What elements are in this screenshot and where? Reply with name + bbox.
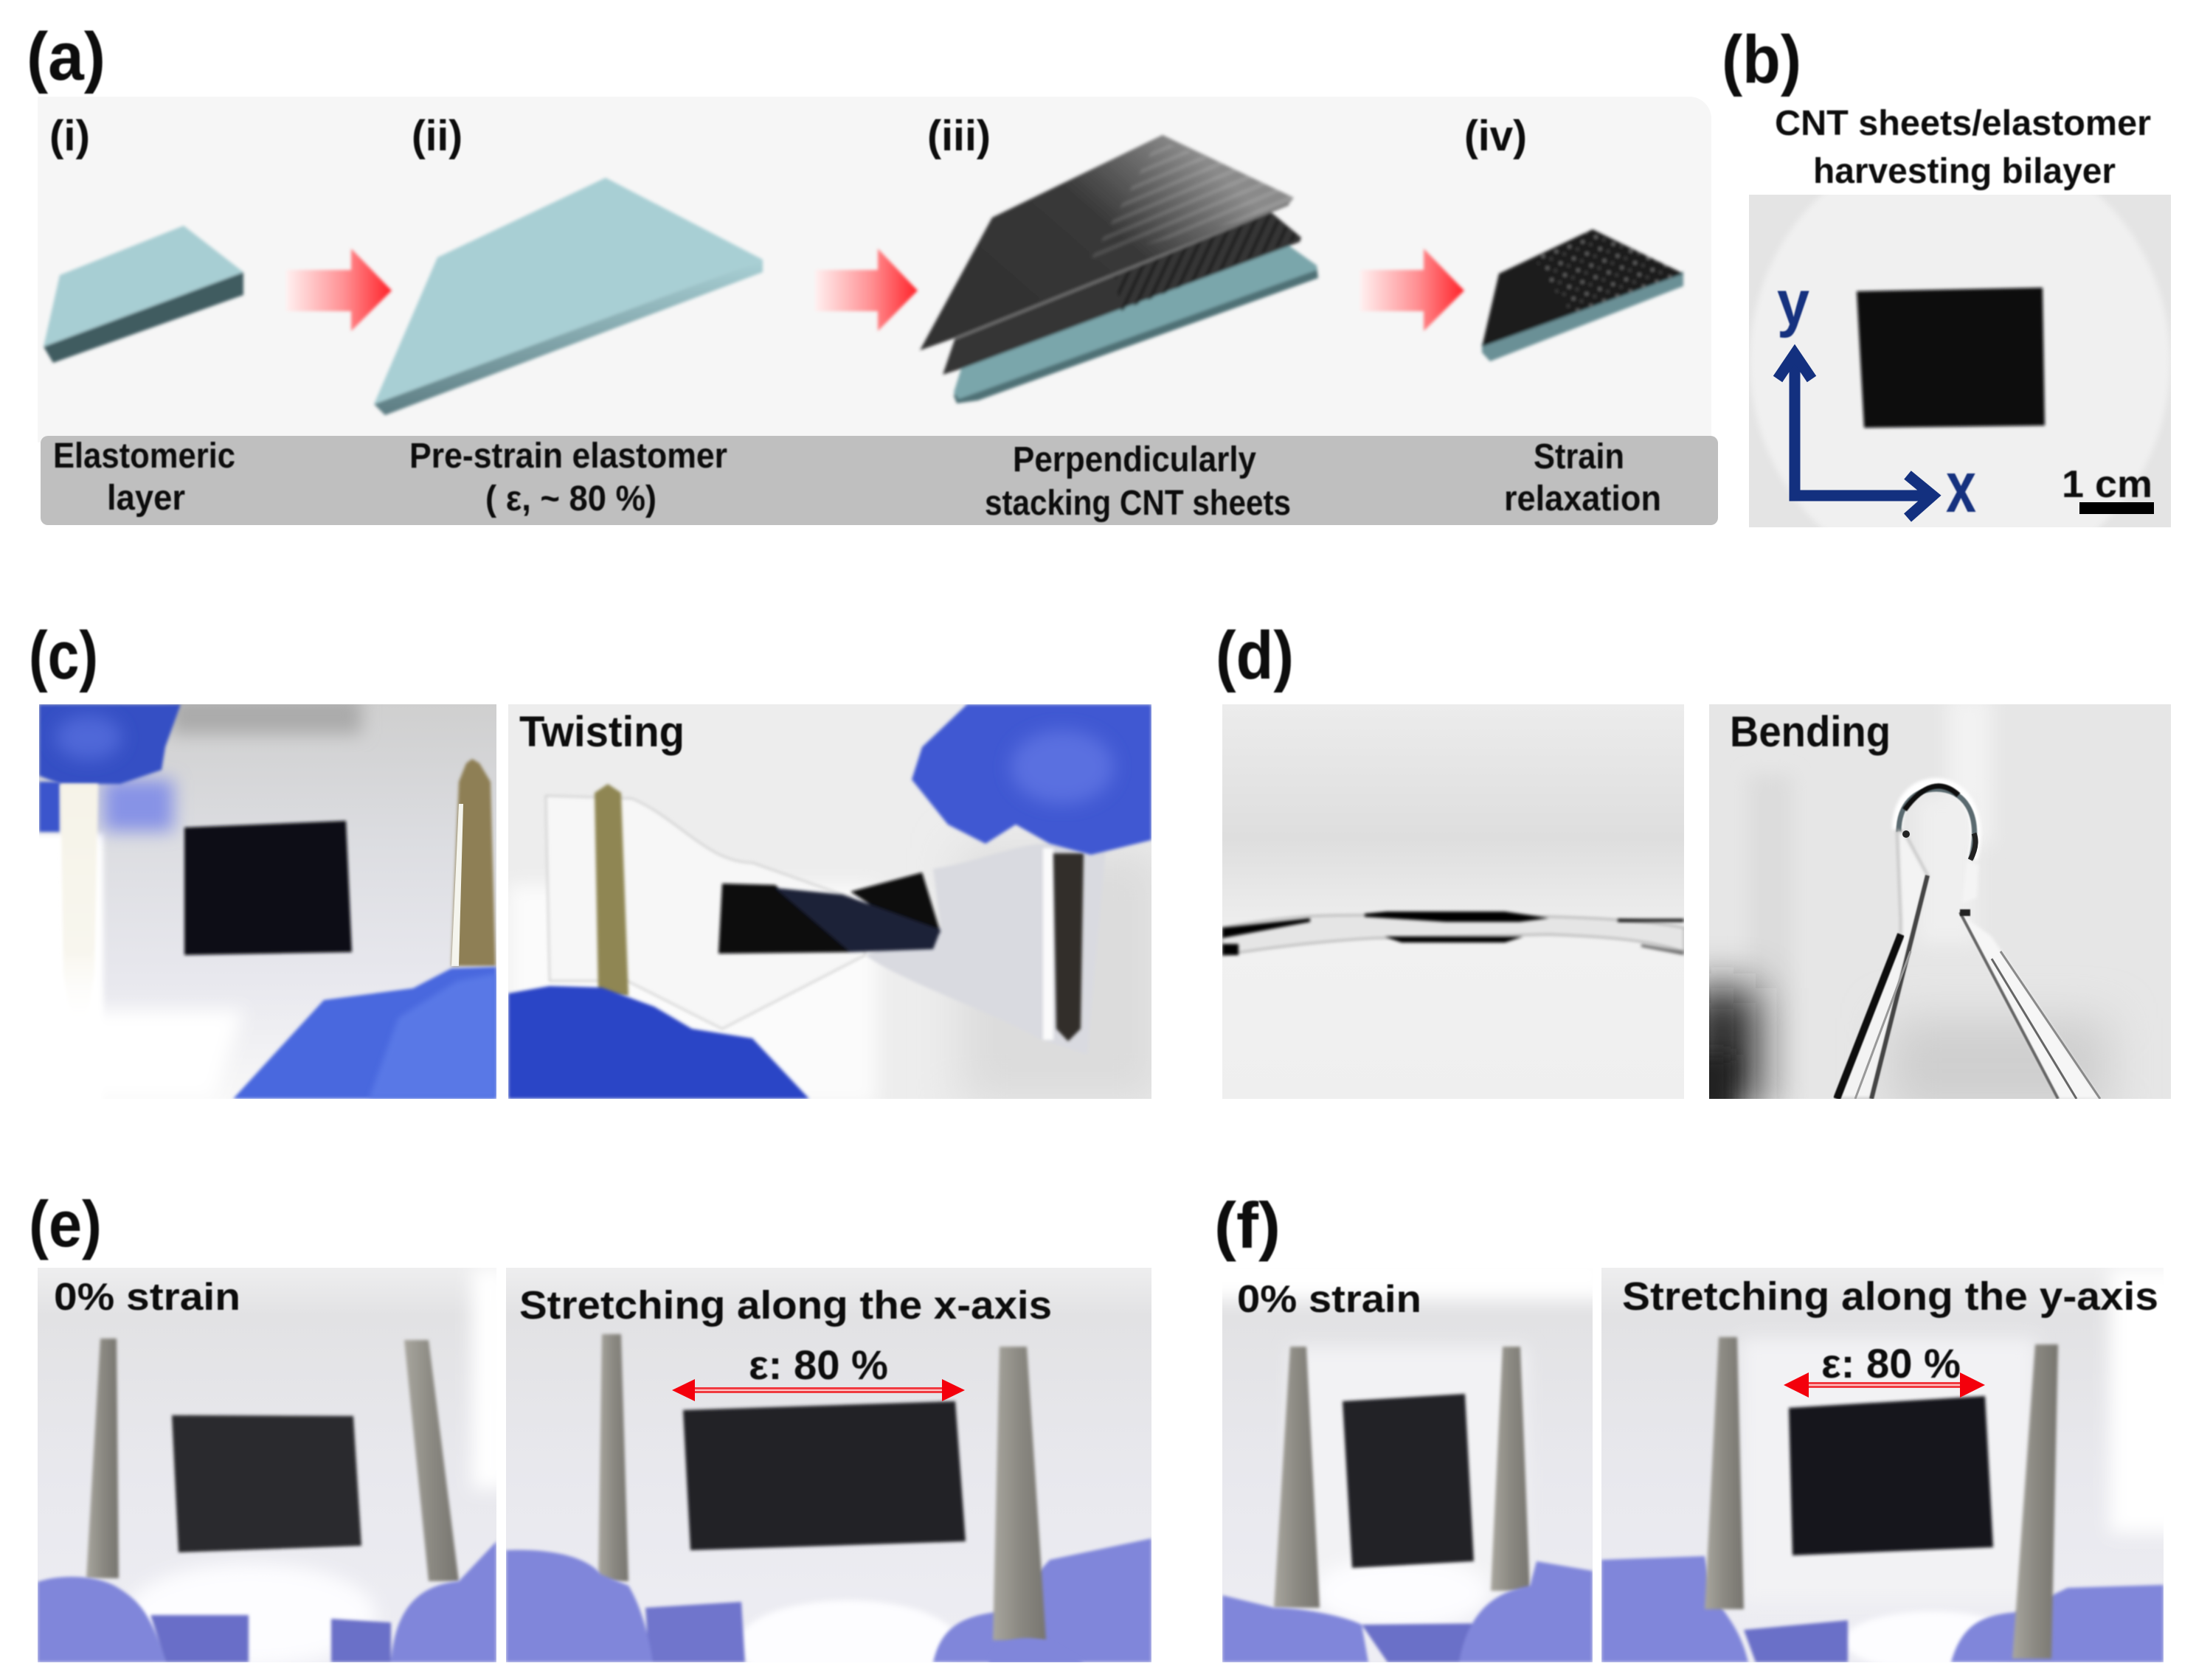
caption: pre-strain elastomer: ( ε, ~ 80 %) [485, 479, 657, 518]
step ii label: (ii) [412, 112, 463, 160]
left leg lines [1837, 934, 1901, 1099]
0% strain label: 0% strain [1237, 1278, 1421, 1321]
panel b title: harvesting bilayer [1813, 152, 2116, 191]
caption bar [41, 436, 1718, 525]
0% strain label: 0% strain [54, 1276, 240, 1319]
panel b title [1775, 104, 2151, 191]
CNT sheet [683, 1401, 966, 1550]
caption: perpendicularly stacking CNT sheets: Perpendicularly [1013, 440, 1256, 479]
black film edges [1222, 912, 1684, 955]
right tweezers [451, 759, 496, 966]
photo: twisted sample [508, 704, 1165, 1106]
dark background corner [1689, 988, 1756, 1114]
photo: 0% strain [38, 1268, 509, 1667]
tweezers [86, 1339, 119, 1578]
strain value: ε: 80 % [749, 1341, 888, 1388]
stretching label: Stretching along the x-axis [519, 1283, 1052, 1327]
panel d label: (d) [1216, 618, 1294, 693]
photo: flat sample held by tweezers [39, 704, 496, 1099]
scale bar: 1 cm [2062, 463, 2152, 506]
caption: pre-strain elastomer: Pre-strain elastomer [409, 437, 727, 476]
elastomer layer slab [44, 226, 243, 363]
panel b: bilayer photo [1724, 32, 2171, 527]
arrow 3 [1360, 249, 1464, 331]
twisting label: Twisting [519, 708, 685, 756]
red double arrow [1784, 1372, 1985, 1398]
panel e label: (e) [29, 1187, 102, 1260]
caption: strain relaxation: relaxation [1504, 479, 1661, 518]
panel b title: CNT sheets/elastomer [1775, 104, 2151, 143]
tweezers [1274, 1347, 1320, 1608]
stacked CNT sheets on elastomer [920, 135, 1318, 403]
pre-strained elastomer slab [374, 178, 763, 415]
xy axes [1778, 354, 1933, 518]
loop [1897, 783, 1975, 859]
CNT sheet [172, 1415, 361, 1552]
panel c: twisting [22, 618, 1165, 1128]
panel a background [38, 97, 1711, 442]
glove top-right [912, 704, 1151, 855]
CNT sheet [1789, 1396, 1993, 1555]
black CNT sheet [1857, 288, 2045, 428]
arrow 2 [815, 249, 918, 331]
bending label: Bending [1730, 708, 1891, 756]
transparent film [546, 796, 865, 1029]
caption: elastomeric layer: Elastomeric [53, 437, 235, 476]
right leg [1958, 912, 2100, 1099]
left tweezers [60, 784, 98, 1022]
gloves [1222, 1561, 1593, 1662]
panel b label: (b) [1722, 22, 1801, 97]
gloves [1601, 1556, 2164, 1662]
black twisted CNT sheet [718, 872, 941, 954]
glove top-left [39, 704, 181, 784]
axis letters [1777, 268, 1976, 527]
left tweezers [595, 784, 628, 996]
panel a: fabrication process [27, 19, 1718, 525]
caption: perpendicularly stacking CNT sheets: stacking CNT sheets [985, 484, 1291, 523]
panel f: stretching along y [1195, 1189, 2183, 1670]
caption: strain relaxation: Strain [1534, 437, 1624, 476]
caption: strain relaxation [1504, 437, 1661, 518]
caption: perpendicularly stacking CNT sheets [985, 440, 1291, 523]
step iii label: (iii) [927, 112, 991, 160]
step i label: (i) [49, 112, 90, 160]
arrow 1 [286, 249, 392, 331]
CNT sheet [1343, 1394, 1474, 1568]
photo background [1749, 195, 2171, 527]
panel a label: (a) [27, 19, 105, 94]
glove bottom-left [508, 986, 809, 1099]
strain value: ε: 80 % [1821, 1340, 1961, 1386]
caption: elastomeric layer [53, 437, 235, 518]
wrinkled bilayer after relaxation [1482, 229, 1683, 361]
caption: pre-strain elastomer [409, 437, 727, 518]
caption: elastomeric layer: layer [107, 479, 185, 518]
tweezers [1705, 1337, 1744, 1609]
panel d: bending [1216, 618, 2171, 1114]
band from loop to legs [1837, 830, 1927, 1099]
axis letters: y [1777, 268, 1809, 339]
panel c label: (c) [29, 618, 98, 693]
stretching label: Stretching along the y-axis [1622, 1274, 2158, 1319]
black CNT square [184, 821, 352, 955]
panel e: stretching along x [29, 1187, 1151, 1680]
tweezers [598, 1334, 628, 1581]
right tweezers [1043, 848, 1053, 1040]
gloves [506, 1538, 1151, 1662]
step iv label: (iv) [1464, 112, 1527, 160]
gloves [38, 1541, 496, 1662]
photo: stretched along x [506, 1268, 1151, 1680]
glove bottom-right [233, 967, 496, 1099]
red double arrow [672, 1379, 965, 1401]
panel f label: (f) [1214, 1189, 1281, 1262]
photo: slightly bent film [1222, 704, 1684, 1099]
axis letters: x [1946, 446, 1976, 527]
photo: stretched along y [1601, 1268, 2183, 1670]
photo: 0% strain [1195, 1254, 1608, 1662]
photo: film bent into a loop [1689, 697, 2171, 1114]
